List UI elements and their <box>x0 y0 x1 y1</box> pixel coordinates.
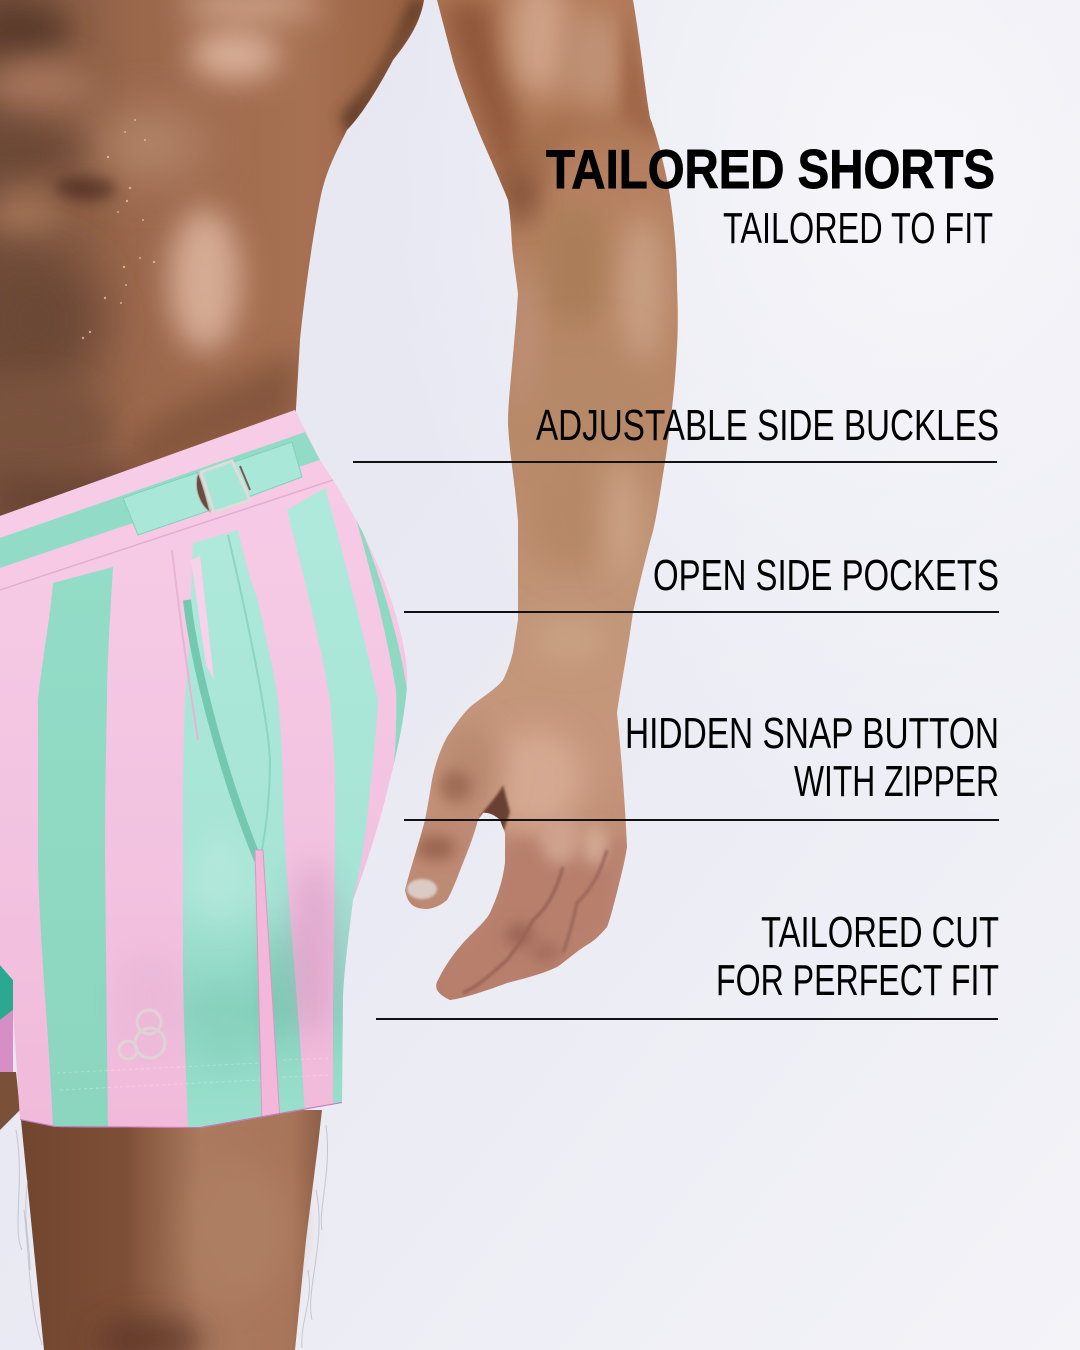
feature: hidden snap button with zipper <box>404 709 999 821</box>
feature: tailored cut for perfect fit <box>376 908 999 1020</box>
pocket opening <box>172 535 270 860</box>
waist tab with metal buckle <box>123 442 302 535</box>
feature: tailored cut for perfect fit: TAILORED CUT <box>761 908 999 957</box>
arm shading <box>437 0 664 660</box>
subheading: TAILORED TO FIT <box>723 204 993 253</box>
model leg <box>16 1110 328 1350</box>
model arm and hand <box>400 0 690 1010</box>
mint stripes <box>38 488 407 1128</box>
model torso <box>0 0 440 540</box>
brand logo mark <box>119 1010 165 1059</box>
fabric shading <box>181 849 348 1045</box>
side seam panel <box>255 850 280 1122</box>
leg hair <box>16 1125 328 1348</box>
heading: TAILORED SHORTS <box>546 138 995 200</box>
water droplets <box>82 119 155 339</box>
hem stitching <box>57 1058 332 1090</box>
waistband <box>0 410 333 592</box>
feature: hidden snap button with zipper: WITH ZIPPER <box>794 757 999 806</box>
hand shading <box>405 725 627 1000</box>
pink and mint striped tailored shorts <box>0 400 430 1140</box>
back leg behind shorts <box>0 965 20 1130</box>
